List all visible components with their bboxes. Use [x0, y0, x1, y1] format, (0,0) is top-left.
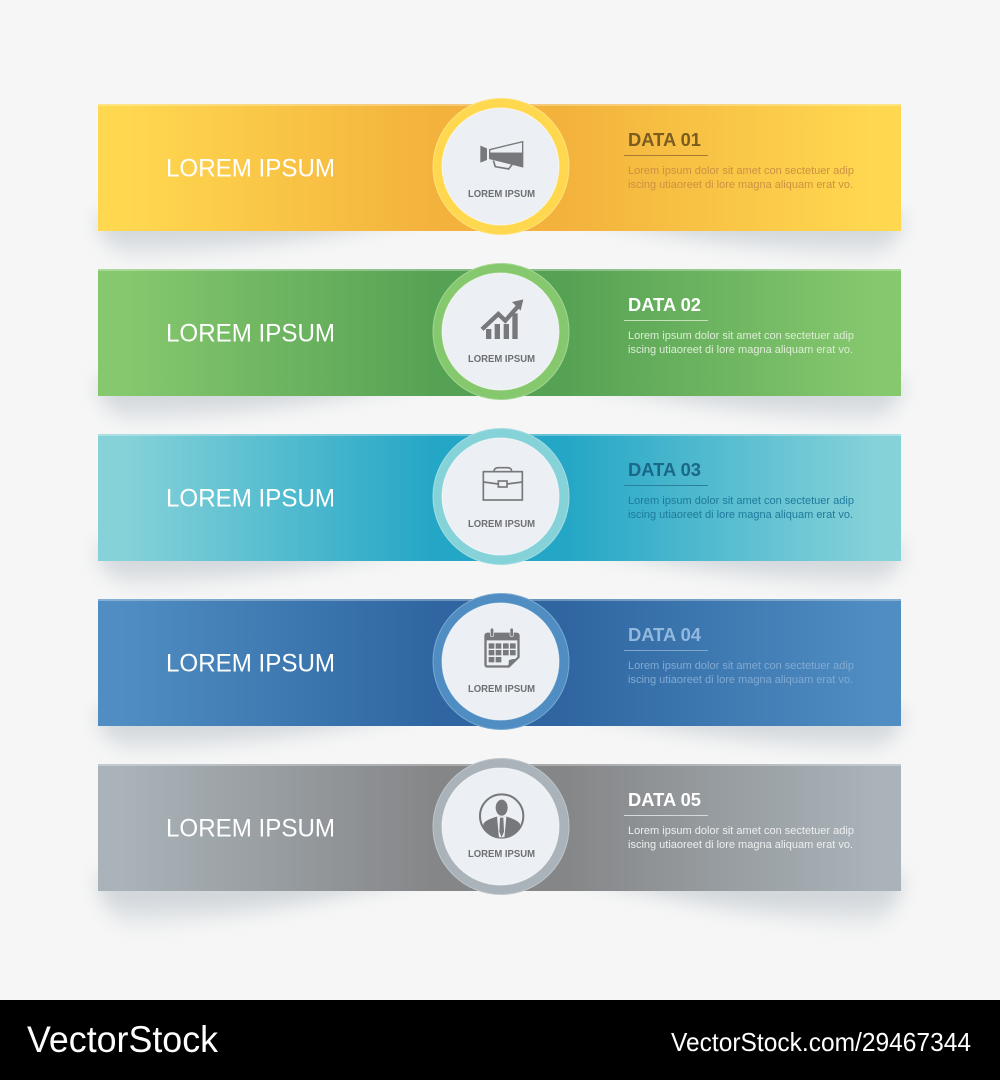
heading: LOREM IPSUM: [166, 814, 335, 842]
icon: megaphone: [480, 142, 523, 169]
panel: row 2 green: [96, 263, 904, 425]
panel: row 3 teal: [96, 428, 904, 590]
body text: iscing utiaoreet di lore magna aliquam erat vo.: [628, 509, 853, 521]
body text: Lorem ipsum dolor sit amet con sectetuer adip: [628, 330, 854, 342]
underline: [624, 485, 708, 486]
data title: DATA 04: [628, 625, 701, 645]
data title: DATA 03: [628, 460, 701, 480]
body text: Lorem ipsum dolor sit amet con sectetuer adip: [628, 660, 854, 672]
shadow: [96, 545, 904, 590]
heading: LOREM IPSUM: [166, 154, 335, 182]
data title: DATA 02: [628, 295, 701, 315]
panel: row 5 gray: [96, 758, 904, 930]
icon: businessman: [480, 794, 523, 840]
circle badge: [432, 428, 570, 565]
bar: [98, 269, 901, 396]
bar: [98, 434, 901, 561]
circle badge: [432, 593, 570, 730]
badge label: LOREM IPSUM: [468, 354, 535, 365]
underline: [624, 155, 708, 156]
badge label: LOREM IPSUM: [468, 849, 535, 860]
data title: DATA 05: [628, 790, 701, 810]
panel: row 1 yellow: [96, 98, 904, 260]
bar: [98, 764, 901, 891]
body text: [628, 495, 854, 521]
body text: iscing utiaoreet di lore magna aliquam erat vo.: [628, 179, 853, 191]
data title: DATA 01: [628, 130, 701, 150]
badge label: LOREM IPSUM: [468, 189, 535, 200]
panel: row 4 blue: [96, 593, 904, 755]
bar: [98, 104, 901, 231]
badge label: LOREM IPSUM: [468, 519, 535, 530]
underline: [624, 320, 708, 321]
bar: [98, 599, 901, 726]
watermark footer: [0, 1000, 1000, 1080]
underline: [624, 815, 708, 816]
body text: [628, 330, 854, 356]
watermark logo text: VectorStock: [27, 1019, 218, 1060]
body text: Lorem ipsum dolor sit amet con sectetuer adip: [628, 495, 854, 507]
heading: LOREM IPSUM: [166, 320, 335, 348]
underline: [624, 650, 708, 651]
circle badge: [432, 263, 570, 400]
shadow: [96, 710, 904, 755]
heading: LOREM IPSUM: [166, 484, 335, 512]
body text: Lorem ipsum dolor sit amet con sectetuer adip: [628, 165, 854, 177]
badge label: LOREM IPSUM: [468, 684, 535, 695]
shadow: [96, 875, 904, 930]
icon: calendar: [484, 628, 520, 668]
icon: growth chart: [482, 299, 523, 339]
circle badge: [432, 758, 570, 895]
circle badge: [432, 98, 570, 235]
body text: iscing utiaoreet di lore magna aliquam erat vo.: [628, 674, 853, 686]
body text: Lorem ipsum dolor sit amet con sectetuer adip: [628, 825, 854, 837]
body text: [628, 165, 854, 191]
shadow: [96, 215, 904, 260]
body text: iscing utiaoreet di lore magna aliquam erat vo.: [628, 839, 853, 851]
body text: [628, 660, 854, 686]
watermark url text: VectorStock.com/29467344: [671, 1027, 971, 1057]
body text: iscing utiaoreet di lore magna aliquam erat vo.: [628, 344, 853, 356]
body text: [628, 825, 854, 851]
shadow: [96, 380, 904, 425]
heading: LOREM IPSUM: [166, 650, 335, 678]
icon: briefcase: [483, 468, 522, 500]
